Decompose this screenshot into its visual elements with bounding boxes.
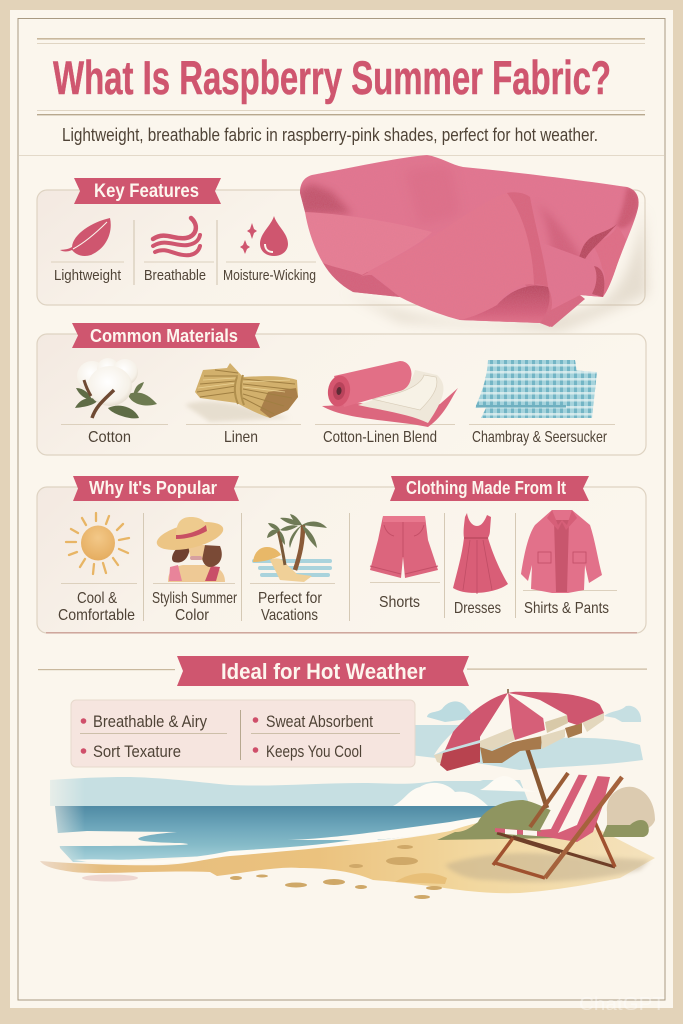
- fabric swatch illustration: [298, 155, 648, 332]
- right fold shadow: [579, 224, 617, 259]
- bottom pocket: [523, 283, 585, 327]
- chair cloth: [540, 774, 610, 842]
- label: perfect for vacations: Perfect for: [258, 590, 323, 607]
- label: breathable: Breathable: [144, 267, 206, 284]
- sky: [50, 701, 643, 806]
- icon: dress: [453, 513, 508, 594]
- ribbon: clothing made from it: Clothing Made From It: [406, 478, 566, 498]
- bullet: breathable and airy: Breathable & Airy: [93, 712, 207, 731]
- panel: why popular and clothing: [37, 476, 646, 634]
- icon: palm trees and beach: [252, 514, 332, 582]
- icon: deck chair: [493, 773, 622, 878]
- subtitle: Lightweight, breathable fabric in raspberry-pink shades, perfect for hot weather.: [62, 125, 598, 145]
- label: perfect for vacations: Vacations: [261, 607, 318, 624]
- label: chambray and seersucker: Chambray & Seersucker: [472, 429, 608, 446]
- icon: water drop with sparkles: [240, 216, 288, 256]
- label: shirts and pants: Shirts & Pants: [524, 600, 609, 617]
- label: dresses: Dresses: [454, 600, 501, 617]
- ribbon: common materials: Common Materials: [90, 326, 238, 346]
- label: linen: Linen: [224, 429, 258, 446]
- label: shorts: Shorts: [379, 594, 420, 611]
- bushes: [437, 787, 655, 840]
- label: cool and comfortable: [58, 590, 135, 624]
- beach illustration: [30, 689, 655, 899]
- underside: [480, 736, 542, 763]
- ribbon: why it's popular: [73, 476, 239, 501]
- label: cotton: Cotton: [88, 429, 131, 446]
- icon: air waves: [153, 218, 200, 255]
- label: cotton-linen blend: Cotton-Linen Blend: [323, 429, 437, 446]
- icon: beach umbrella: [434, 689, 604, 808]
- label: lightweight: Lightweight: [54, 267, 122, 284]
- icon: woman in straw hat: [154, 517, 226, 582]
- icon: linen bundle: [185, 363, 298, 422]
- canopy panels: [434, 730, 455, 755]
- bullet: soft texture: Sort Texature: [93, 742, 181, 761]
- chair shadow: [445, 853, 650, 882]
- section heading: ideal for hot weather: [38, 656, 647, 686]
- icon: shirt: [521, 510, 602, 593]
- icon: chambray and seersucker cloth: [475, 360, 597, 418]
- label: cool and comfortable: Cool &: [77, 590, 117, 607]
- ribbon: key features: [74, 178, 221, 204]
- label: stylish summer color: Stylish Summer: [152, 590, 238, 607]
- right under fold: [535, 240, 605, 305]
- icon: cotton boll: [75, 358, 157, 418]
- icon: fabric roll and folded stack: [322, 361, 458, 427]
- label: cool and comfortable: Comfortable: [58, 607, 135, 624]
- watermark: ChatGPT: [579, 994, 665, 1014]
- label: perfect for vacations: [258, 590, 323, 624]
- foam: [30, 831, 188, 846]
- valance: [480, 728, 515, 750]
- ribbon: why it's popular: Why It's Popular: [89, 478, 217, 498]
- panel: key features: [37, 178, 645, 305]
- sand: [40, 817, 655, 893]
- left front flap: [305, 212, 432, 275]
- label: stylish summer color: Color: [175, 607, 210, 624]
- bullet: keeps you cool: Keeps You Cool: [266, 742, 362, 761]
- left lower fold: [323, 263, 400, 297]
- bullet: sweat absorbent: Sweat Absorbent: [266, 712, 373, 731]
- icon: shorts: [370, 516, 438, 578]
- ribbon: key features: Key Features: [94, 181, 199, 202]
- label: moisture-wicking: Moisture-Wicking: [223, 267, 316, 284]
- sea: [55, 806, 510, 862]
- section heading: ideal for hot weather: Ideal for Hot Weather: [221, 659, 426, 684]
- ribbon: common materials: [72, 323, 260, 348]
- center front flap: [360, 192, 548, 320]
- panel: common materials: [37, 323, 646, 455]
- label: stylish summer color: [152, 590, 238, 624]
- text box: benefits: [71, 700, 415, 767]
- icon: sun: [66, 513, 129, 574]
- icon: feather: [60, 218, 111, 256]
- back sheet: [300, 155, 639, 327]
